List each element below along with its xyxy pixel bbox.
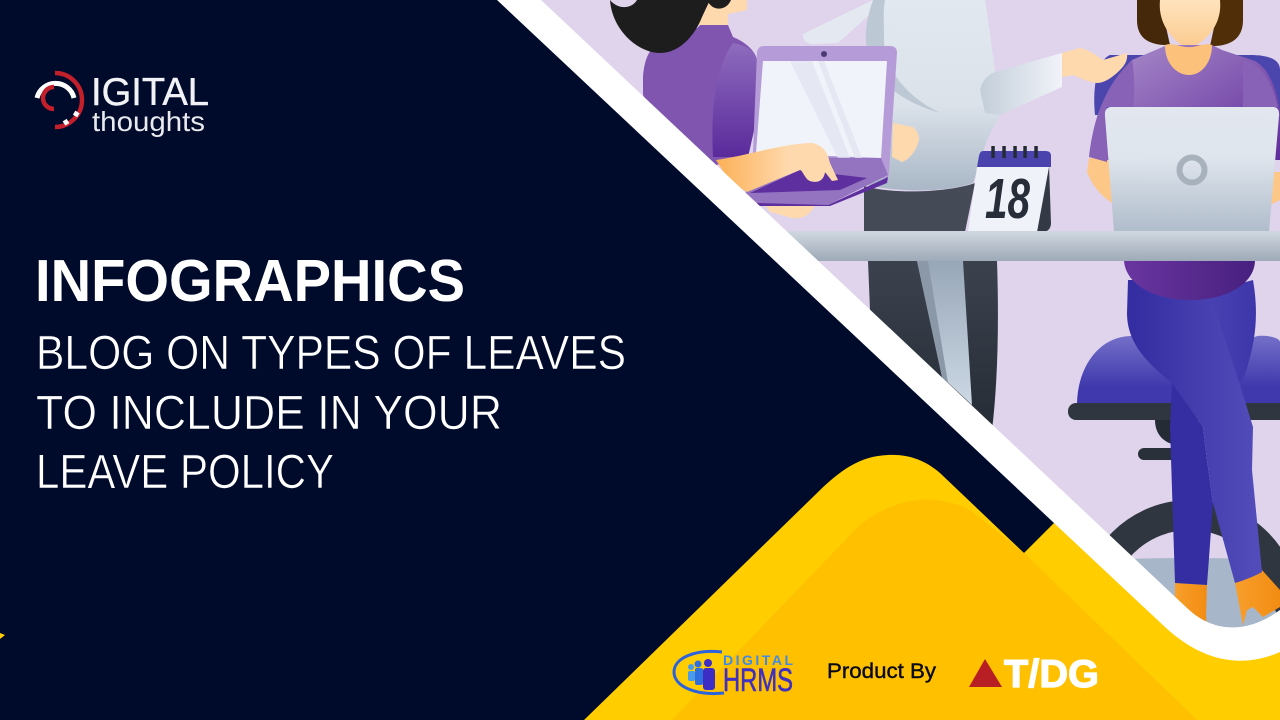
wordmark T/DG: T/DG [1004, 653, 1099, 696]
inner darker yellow shape [672, 500, 1197, 720]
icon: calendar showing 18 [968, 146, 1051, 232]
yellow corner shape [584, 455, 1280, 720]
logo: TDG [969, 653, 1099, 696]
text: Product By: Product By [827, 660, 937, 683]
logo wordmark top: IGITAL [91, 71, 209, 114]
subheading text block: TO INCLUDE IN YOUR [36, 387, 502, 440]
figure: pointing arm [716, 143, 838, 192]
logo: Digital Thoughts [37, 71, 209, 137]
icon: three people [688, 659, 715, 690]
subheading text block: LEAVE POLICY [36, 446, 334, 499]
subheading text block [36, 327, 626, 499]
icon: purple laptop [745, 46, 897, 206]
decorative star fragment [0, 633, 5, 639]
figure: crossed legs and shoes [1127, 280, 1280, 630]
subheading text block: BLOG ON TYPES OF LEAVES [36, 327, 626, 380]
figure: woman with purple laptop [610, 0, 815, 218]
figure: seated woman top hem [1124, 261, 1255, 300]
heading: INFOGRAPHICS: INFOGRAPHICS [35, 248, 465, 314]
icon: red triangle [969, 659, 1002, 687]
figure: seated woman upper body [1087, 0, 1280, 205]
desk [780, 231, 1280, 261]
icon: calendar showing 18: 18 [985, 167, 1030, 231]
figure: man in white shirt [803, 0, 1062, 430]
chair [1068, 336, 1280, 705]
floor under chair [1100, 558, 1280, 660]
logo wordmark bottom: thoughts [92, 106, 205, 137]
logo: Digital HRMS [674, 651, 793, 698]
icon: grey laptop [1105, 107, 1279, 232]
figure: man's hand on shoulder [1062, 48, 1127, 83]
floor foreground [1112, 558, 1280, 660]
logo mark [37, 73, 82, 127]
illustration panel: office scene [497, 0, 1280, 705]
wordmark HRMS: HRMS [723, 662, 793, 698]
wordmark DIGITAL: DIGITAL [723, 652, 793, 668]
